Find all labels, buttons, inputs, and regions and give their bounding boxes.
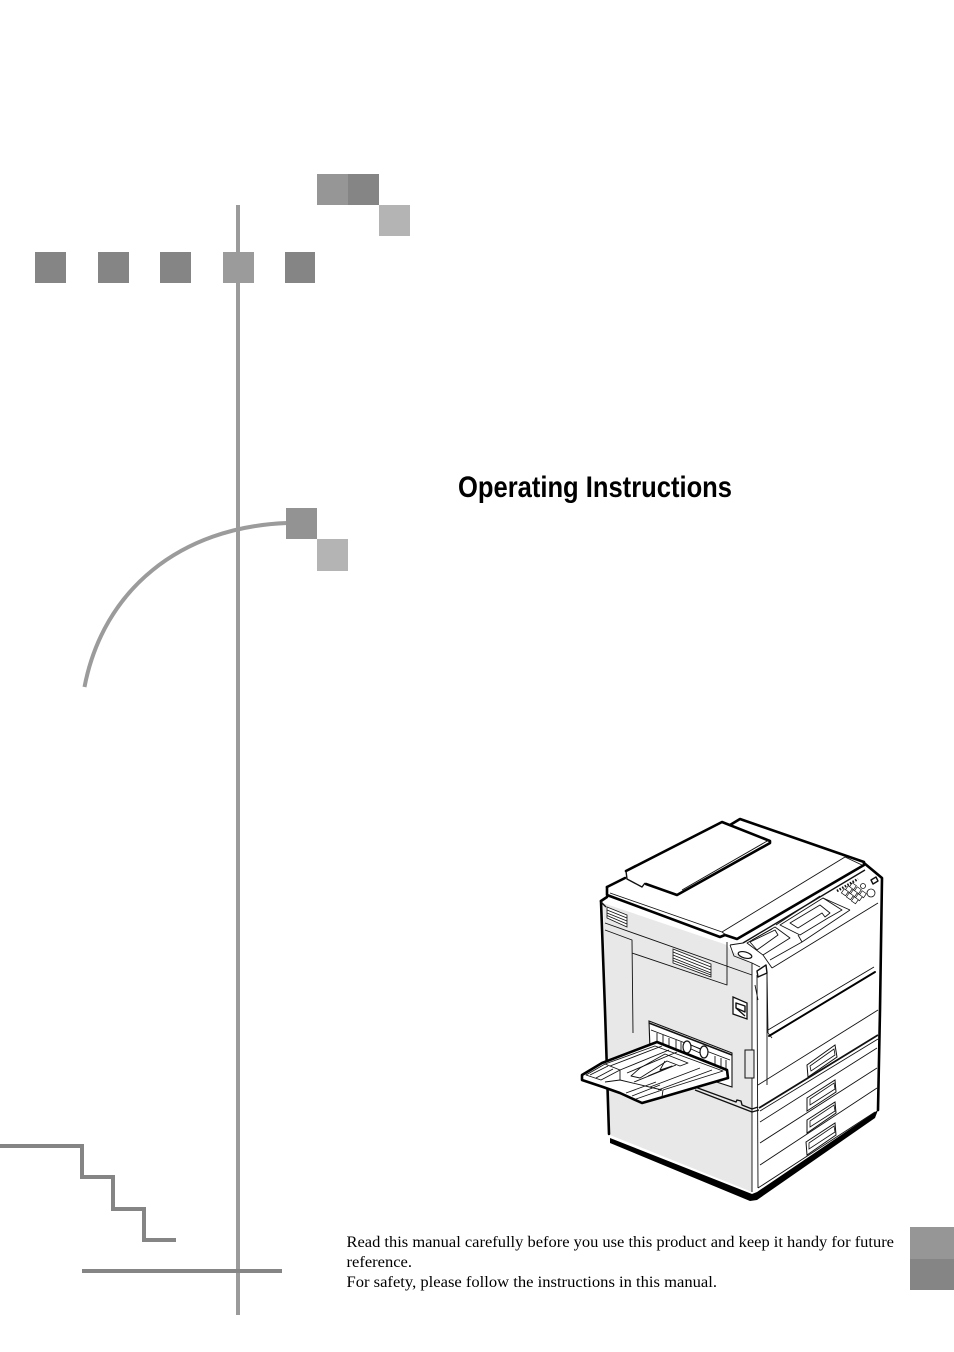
copier base shadow (610, 1110, 878, 1201)
platen (610, 857, 862, 935)
notice text (346, 1234, 894, 1291)
front door (767, 967, 875, 1038)
arc square cluster (286, 508, 348, 571)
power hinge (757, 965, 767, 977)
vent middle (673, 949, 711, 977)
main switch (733, 997, 747, 1019)
notice text: Read this manual carefully before you use this product and keep it handy for future (346, 1234, 894, 1251)
side handle (745, 1050, 754, 1078)
notice text: For safety, please follow the instructions in this manual. (346, 1274, 717, 1291)
bypass tray (582, 1042, 728, 1103)
display panel (780, 898, 842, 935)
staircase line (0, 1146, 176, 1240)
vertical rule (236, 205, 240, 1315)
keypad (841, 883, 866, 904)
button strip (837, 879, 858, 891)
base seam (695, 1087, 759, 1112)
copier side panel (603, 903, 752, 1192)
top square cluster (317, 174, 410, 236)
notice text: reference. (346, 1254, 412, 1271)
horizontal rule (82, 1269, 282, 1273)
bypass opening (649, 1021, 732, 1087)
row of squares (35, 252, 315, 283)
paper drawers (758, 1010, 878, 1188)
drawer handles (806, 1045, 837, 1155)
curved arc (84, 523, 287, 687)
right edge tab (910, 1227, 954, 1290)
vent left (607, 907, 627, 927)
document cover (626, 822, 770, 895)
small panel (747, 927, 790, 955)
side panel lines (601, 902, 767, 1192)
title: Operating Instructions (458, 471, 732, 504)
copier outline (601, 819, 882, 1134)
control panel (730, 868, 880, 968)
illustration: copier (582, 819, 882, 1201)
